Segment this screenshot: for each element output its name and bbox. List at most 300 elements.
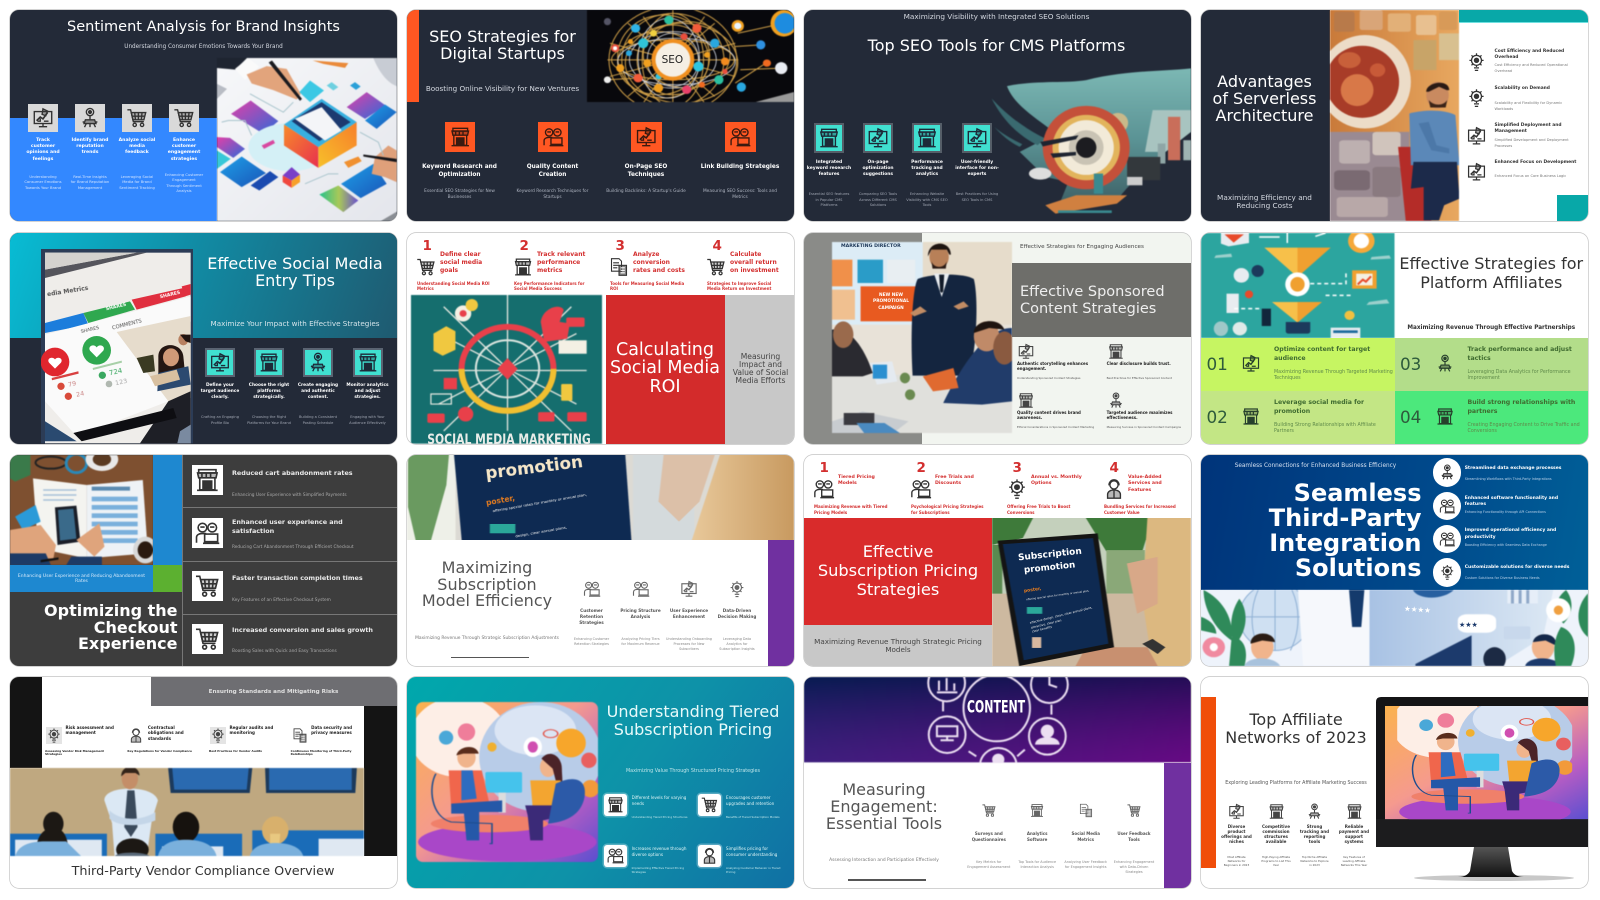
subtitle: Maximizing Revenue Through Strategic Subscription Adjustments bbox=[415, 636, 559, 640]
subtitle: Assessing Interaction and Participation Effectively bbox=[829, 858, 939, 863]
title: ROI bbox=[649, 377, 681, 397]
title bbox=[1216, 711, 1376, 748]
item 4: calculate return: Media Return on Investment bbox=[707, 286, 771, 291]
item: on-page SEO: On-Page SEO bbox=[625, 164, 667, 170]
title: Essential Tools bbox=[826, 814, 942, 833]
item: strong tracking bbox=[1295, 803, 1334, 869]
title: Top SEO Tools for CMS Platforms bbox=[868, 36, 1125, 55]
item 4: calculate return: 4 bbox=[712, 238, 722, 254]
image text: subscription: Subscription bbox=[1018, 547, 1082, 563]
item 2: free trials: 2 bbox=[916, 460, 926, 476]
block 01 bbox=[1201, 338, 1394, 391]
item: cost efficiency: Overhead bbox=[1494, 69, 1512, 73]
item: track customer opinions: Consumer Emotions bbox=[24, 180, 62, 184]
item: analyze social media feedback: Leveraging Social bbox=[121, 175, 153, 179]
item: reliable payment bbox=[1334, 803, 1374, 869]
subtitle: Reducing Costs bbox=[1236, 201, 1293, 210]
block 01: 01 bbox=[1206, 354, 1228, 374]
slide: Third-Party Vendor Compliance Overview bbox=[10, 677, 397, 888]
item: regular audits: Best Practices for Vendor Audits bbox=[209, 749, 262, 753]
item 4: value-added bbox=[1094, 462, 1191, 517]
item: quality content bbox=[516, 122, 588, 200]
item: encourages upgrades: upgrades and retention bbox=[726, 801, 774, 806]
image text: pill stars: ★★★ bbox=[1459, 621, 1478, 629]
item 3: analyze conversion bbox=[610, 238, 685, 291]
item: user-friendly interface: experts bbox=[968, 172, 986, 177]
item: keyword research features: Platforms bbox=[820, 203, 838, 207]
item: strong tracking: reporting bbox=[1304, 834, 1325, 839]
title: Understanding Tiered bbox=[607, 702, 779, 721]
item: clear disclosure: Best Practices for Effective Sponsored Content bbox=[1107, 376, 1172, 380]
row: increased conversion: Boosting Sales with Quick and Easy Transactions bbox=[232, 649, 337, 654]
item 1: define goals: 1 bbox=[422, 238, 432, 254]
item: customer retention: Strategies bbox=[579, 620, 604, 625]
item: keyword research: Essential SEO Strategies for New bbox=[424, 189, 495, 194]
slide: Advantages of Serverless Architecture bbox=[1201, 10, 1588, 221]
item: create authentic content: Building a Consistent bbox=[299, 415, 337, 419]
title: Effective bbox=[863, 542, 933, 561]
item 1: tiered pricing: Maximizing Revenue with Tiered bbox=[814, 504, 887, 509]
image text: new promotional campaign: NEW NEW bbox=[879, 293, 903, 298]
item: enhanced software: features bbox=[1465, 502, 1486, 507]
title: Strategies bbox=[857, 580, 939, 599]
item: targeted audience bbox=[1107, 392, 1193, 440]
item: strong tracking: Top Niche Affiliate bbox=[1302, 855, 1327, 859]
image text: red share band: SHARES bbox=[160, 291, 181, 301]
item: identify brand reputation trends bbox=[70, 104, 109, 190]
item: cost efficiency: Overhead bbox=[1494, 55, 1518, 60]
item: regular audits: monitoring bbox=[230, 730, 255, 735]
item: scalability: Scalability on Demand bbox=[1494, 86, 1550, 91]
item: quality content: Quality content drives brand bbox=[1017, 410, 1081, 415]
row: increased conversion bbox=[182, 614, 397, 666]
item: user experience: Processes for New bbox=[674, 642, 704, 646]
item: quality content: Quality Content bbox=[527, 164, 578, 170]
item: keyword research: Keyword Research and bbox=[422, 164, 497, 170]
title bbox=[804, 782, 964, 832]
item 2: free trials: Psychological Pricing Strategies bbox=[911, 504, 984, 509]
item: simplifies pricing: Analyzing Customer Behavior in Tiered bbox=[726, 866, 780, 870]
title: Digital Startups bbox=[440, 44, 565, 63]
item: user-friendly interface bbox=[955, 123, 999, 202]
item: user-friendly interface: Best Practices for Using bbox=[956, 192, 998, 196]
block 03: Leveraging Data Analytics for Performance bbox=[1468, 370, 1571, 375]
image text: design details: effective design, clean, clear annual plans, bbox=[1029, 605, 1093, 625]
item: performance tracking bbox=[906, 123, 948, 207]
item: authentic storytelling bbox=[1017, 344, 1088, 380]
item: on-page optimization: Comparing SEO Tools bbox=[859, 192, 897, 196]
item: identify brand reputation trends: reputation bbox=[76, 144, 104, 149]
item: link building: Measuring SEO Success: Tools and bbox=[703, 189, 777, 194]
item: customizable solutions: Custom Solutions for Diverse Business Needs bbox=[1465, 576, 1540, 580]
item: streamlined data exchange: Streamlined data exchange processes bbox=[1465, 466, 1561, 471]
item 3: annual vs monthly: 3 bbox=[1012, 460, 1022, 476]
subtitle: Impact and bbox=[739, 360, 782, 369]
item: reliable payment: Key Features of bbox=[1343, 855, 1365, 859]
item 1: tiered pricing bbox=[804, 462, 901, 517]
image text: green share band: SHARES bbox=[106, 303, 127, 313]
title bbox=[610, 340, 720, 397]
header image: content cycle diagram bbox=[804, 677, 1191, 763]
image text: 724: 724 bbox=[108, 367, 123, 378]
item: analyze social media feedback: feedback bbox=[125, 150, 149, 155]
item 1: define goals: Metrics bbox=[417, 286, 434, 291]
row: enhanced user experience: Enhanced user experience and bbox=[232, 518, 343, 526]
item 2: free trials: Discounts bbox=[935, 481, 961, 486]
item: competitive commission: commission bbox=[1262, 829, 1290, 834]
item: contractual obligations bbox=[127, 723, 207, 759]
item: create authentic content: Posting Schedule bbox=[303, 421, 333, 425]
block 02: Leverage social media for bbox=[1274, 399, 1364, 406]
item: user feedback tools: Enhancing Engagement bbox=[1114, 860, 1154, 864]
subtitle: Maximize Your Impact with Effective Strategies bbox=[210, 319, 380, 328]
item: on-page SEO bbox=[606, 122, 686, 194]
item: user feedback tools: Strategies bbox=[1125, 870, 1143, 874]
item 4: value-added: 4 bbox=[1110, 460, 1119, 476]
title bbox=[1394, 255, 1588, 292]
item: user experience: Understanding Onboarding bbox=[666, 637, 712, 641]
item: monitor analytics: Engaging with Your bbox=[350, 415, 385, 419]
item: increases revenue: diverse options bbox=[632, 852, 663, 857]
item: enhance customer engagement: Enhance bbox=[173, 138, 195, 143]
item 1: define goals: social media bbox=[440, 259, 482, 266]
item: quality content: awareness. bbox=[1017, 415, 1042, 420]
title: SEO Strategies for bbox=[429, 27, 576, 46]
item 4: calculate return: on investment bbox=[730, 267, 779, 274]
block 01: Optimize content for target bbox=[1274, 346, 1370, 353]
image text: design details bbox=[1029, 605, 1095, 634]
title: Advantages bbox=[1217, 72, 1312, 90]
title: Measuring bbox=[842, 780, 926, 799]
row: reduced cart abandonment: Reduced cart abandonment rates bbox=[232, 469, 353, 477]
item 3: annual vs monthly: Conversions bbox=[1007, 510, 1035, 515]
item: increases revenue: Increases revenue through bbox=[632, 846, 686, 851]
title bbox=[429, 27, 576, 63]
item: monitor analytics: and adjust bbox=[355, 389, 380, 394]
item: streamlined data exchange bbox=[1432, 458, 1588, 487]
slide: Measuring Engagement: Essential Tools bbox=[804, 677, 1191, 888]
block 01: Maximizing Revenue Through Targeted Marketing bbox=[1274, 370, 1393, 375]
item 3: analyze conversion: ROI bbox=[610, 286, 618, 291]
row: enhanced user experience: Reducing Cart Abandonment Through Efficient Checkout bbox=[232, 545, 354, 550]
item: create authentic content: Create engaging bbox=[298, 383, 338, 388]
item: diverse offerings: product bbox=[1228, 829, 1246, 834]
item: simplifies pricing: Pricing bbox=[726, 870, 735, 874]
item: keyword research features: keyword research bbox=[807, 166, 851, 171]
item: data-driven: Decision Making bbox=[718, 614, 756, 619]
item: on-page SEO: Building Backlinks: A Startup's Guide bbox=[606, 189, 686, 194]
red title panel bbox=[606, 295, 724, 444]
item: social media metrics: for Engagement Insights bbox=[1065, 865, 1107, 869]
item 1: tiered pricing: 1 bbox=[820, 460, 829, 476]
image: SEO network globe bbox=[586, 10, 794, 103]
item 2: free trials: for Subscriptions bbox=[911, 510, 950, 515]
item 1: tiered pricing: Tiered Pricing bbox=[838, 475, 875, 480]
item: pricing structure: Analyzing Pricing Tiers bbox=[621, 637, 660, 641]
item: cost efficiency: Cost Efficiency and Reduced bbox=[1494, 49, 1564, 54]
title: Subscription Pricing bbox=[614, 720, 772, 739]
row: enhanced user experience: satisfaction bbox=[232, 526, 274, 534]
item 2: track metrics: metrics bbox=[537, 267, 562, 274]
item 4: value-added: Features bbox=[1128, 488, 1151, 493]
underline bbox=[451, 656, 529, 658]
subtitle bbox=[1217, 193, 1312, 210]
header panel bbox=[1201, 455, 1588, 590]
purple bar bbox=[1164, 763, 1191, 888]
item 2: track metrics: performance bbox=[537, 259, 580, 266]
gray subtitle panel bbox=[804, 625, 992, 666]
item: user-friendly interface: interface for non- bbox=[955, 166, 999, 171]
item: streamlined data exchange: Streamlining Workflows with Third-Party Integrations bbox=[1465, 477, 1552, 481]
image: presenter in meeting room bbox=[831, 242, 1013, 434]
item: contractual obligations: standards bbox=[148, 736, 171, 741]
item: analyze social media feedback bbox=[118, 104, 155, 190]
row: faster completion: Faster transaction completion times bbox=[232, 574, 363, 582]
black left bar bbox=[10, 677, 42, 768]
item: analyze social media feedback: media bbox=[129, 144, 145, 149]
item: strong tracking: Networks to Explore bbox=[1300, 859, 1329, 863]
item: quality content bbox=[1017, 392, 1103, 440]
item: authentic storytelling: Authentic storytelling enhances bbox=[1017, 361, 1088, 366]
gray side panel bbox=[724, 295, 794, 444]
item: clear disclosure bbox=[1107, 343, 1193, 391]
item: simplified deployment: Simplified Development and Deployment bbox=[1494, 138, 1569, 142]
title bbox=[1020, 284, 1165, 317]
item: scalability: Scalability and Flexibility for Dynamic bbox=[1494, 101, 1562, 105]
item: link building: Link Building Strategies bbox=[701, 164, 779, 170]
item: improved efficiency: productivity bbox=[1465, 535, 1496, 540]
item: performance tracking: analytics bbox=[916, 172, 938, 177]
item: competitive commission: Year bbox=[1273, 863, 1279, 867]
item: analytics software bbox=[1013, 803, 1062, 877]
slide: Effective Social Media Entry Tips bbox=[10, 233, 397, 444]
block 02: promotion bbox=[1274, 408, 1310, 415]
title: Integration bbox=[1269, 529, 1422, 557]
item: enhance customer engagement: Enhancing Customer bbox=[165, 173, 203, 177]
item: data security: Data security and bbox=[311, 725, 352, 730]
purple bar bbox=[768, 540, 794, 666]
title: Calculating bbox=[616, 340, 714, 360]
item: contractual obligations: Key Regulations for Vendor Compliance bbox=[127, 749, 192, 753]
item: define target audience bbox=[200, 348, 240, 425]
item: user experience bbox=[664, 580, 714, 654]
block 04: Creating Engaging Content to Drive Traffic and bbox=[1468, 423, 1580, 428]
item: surveys bbox=[964, 803, 1013, 877]
item: enhanced focus: Enhanced Focus on Development bbox=[1494, 160, 1576, 165]
item: encourages upgrades bbox=[698, 794, 788, 824]
subtitle: Seamless Connections for Enhanced Business Efficiency bbox=[1235, 463, 1396, 469]
gradient header panel bbox=[10, 233, 397, 338]
item 2: track metrics bbox=[514, 238, 586, 291]
title: Platform Affiliates bbox=[1420, 273, 1562, 292]
item: create authentic content bbox=[298, 348, 338, 425]
item: customizable solutions: Customizable solutions for diverse needs bbox=[1465, 565, 1569, 570]
item: identify brand reputation trends: Management bbox=[78, 186, 102, 190]
item: create authentic content: and authentic bbox=[301, 389, 335, 394]
title: Content Strategies bbox=[1020, 301, 1156, 317]
item: risk assessment: Assessing Vendor Risk Management bbox=[45, 749, 104, 753]
subtitle bbox=[804, 638, 992, 654]
item: on-page optimization: optimization bbox=[862, 166, 894, 171]
image text: poster: poster, bbox=[1024, 587, 1042, 594]
row: faster completion bbox=[182, 560, 397, 614]
item: diverse offerings: Diverse bbox=[1228, 824, 1245, 829]
item: user experience: Subscribers bbox=[679, 647, 699, 651]
title: Third-Party Vendor Compliance Overview bbox=[72, 864, 334, 879]
item: simplifies pricing: Simplifies pricing for bbox=[726, 846, 768, 851]
item: clear disclosure: Clear disclosure builds trust. bbox=[1107, 361, 1171, 366]
item: contractual obligations: obligations and bbox=[148, 730, 184, 735]
image text: marketing director: MARKETING DIRECTOR bbox=[841, 244, 901, 249]
title: Architecture bbox=[1216, 106, 1313, 124]
item: enhance customer engagement: Through Sentiment bbox=[166, 184, 202, 188]
item: data security: Relationships bbox=[291, 752, 313, 756]
title: Entry Tips bbox=[255, 271, 335, 290]
item: keyword research bbox=[422, 122, 497, 200]
item 1: define goals: goals bbox=[440, 267, 458, 274]
image label: SEO: SEO bbox=[662, 54, 683, 66]
item 2: track metrics: 2 bbox=[520, 238, 529, 254]
item: data security: privacy measures bbox=[311, 730, 352, 735]
item 3: annual vs monthly: Options bbox=[1031, 481, 1052, 486]
item: strong tracking: tracking and bbox=[1300, 829, 1329, 834]
item: analyze social media feedback: Media for Brand bbox=[122, 180, 152, 184]
item: performance tracking: Visibility with CMS SEO bbox=[906, 198, 948, 202]
subtitle: Maximizing Value Through Structured Pricing Strategies bbox=[626, 769, 760, 774]
dark title panel bbox=[1201, 10, 1330, 221]
block 04: Conversions bbox=[1468, 429, 1497, 434]
slide: Calculating Social Media ROI bbox=[407, 233, 794, 444]
item: different levels: Understanding Tiered Pricing Structures bbox=[632, 815, 687, 819]
blue vertical bar bbox=[153, 455, 182, 565]
item: risk assessment: Strategies bbox=[45, 752, 62, 756]
item: user-friendly interface: User-friendly bbox=[961, 160, 993, 165]
title bbox=[1213, 72, 1316, 124]
item 3: annual vs monthly bbox=[997, 462, 1094, 517]
subtitle: Understanding Consumer Emotions Towards Your Brand bbox=[124, 44, 283, 50]
subtitle: Value of Social bbox=[733, 368, 788, 377]
item 4: value-added: Value-Added bbox=[1128, 475, 1161, 480]
item: regular audits: Regular audits and bbox=[230, 725, 273, 730]
item: define target audience: Profile Bio bbox=[211, 421, 229, 425]
item 1: tiered pricing: Pricing Models bbox=[814, 510, 847, 515]
title: Social Media bbox=[610, 358, 720, 378]
item 3: analyze conversion: rates and costs bbox=[633, 267, 685, 274]
item: choose platforms: Platforms for Your Brand bbox=[247, 421, 291, 425]
teal corner block bbox=[1557, 195, 1588, 221]
item: simplified deployment: Processes bbox=[1494, 144, 1512, 148]
item: user feedback tools: User Feedback bbox=[1117, 831, 1151, 836]
slide: SEO Strategies for Digital Startups bbox=[407, 10, 794, 221]
item: define target audience: Crafting an Engaging bbox=[201, 415, 239, 419]
item 4: calculate return: overall return bbox=[730, 259, 777, 266]
item: create authentic content: content. bbox=[308, 395, 328, 400]
item: monitor analytics: Audience Effectively bbox=[349, 421, 386, 425]
item: link building: Metrics bbox=[732, 195, 748, 200]
item: identify brand reputation trends: Identify brand bbox=[72, 138, 108, 143]
item: competitive commission: Programs to List This bbox=[1261, 859, 1291, 863]
item: simplified deployment: Management bbox=[1494, 129, 1527, 134]
subtitle: Maximizing Efficiency and bbox=[1217, 193, 1312, 202]
item: keyword research: Optimization bbox=[438, 172, 481, 178]
item: increases revenue bbox=[604, 845, 694, 875]
title: Third-Party bbox=[1269, 504, 1422, 532]
image text: clear annual plans: design, clear annual plans, bbox=[515, 524, 567, 539]
item: authentic storytelling: engagement. bbox=[1017, 366, 1046, 371]
item: reliable payment: payment and bbox=[1339, 829, 1369, 834]
item: diverse offerings: offerings and bbox=[1221, 834, 1252, 839]
item: data-driven: Analytics for bbox=[726, 642, 748, 646]
title: Solutions bbox=[1295, 554, 1422, 582]
item: competitive commission bbox=[1256, 803, 1296, 869]
item: link building bbox=[701, 122, 780, 200]
item: targeted audience: Measuring Success in Sponsored Content Campaigns bbox=[1107, 425, 1181, 429]
item: track customer opinions: customer bbox=[31, 144, 55, 149]
subtitle: Boosting Online Visibility for New Ventures bbox=[426, 84, 579, 93]
title: Optimizing the bbox=[44, 601, 178, 620]
subtitle: Maximizing Visibility with Integrated SEO Solutions bbox=[904, 12, 1089, 21]
item: performance tracking: tracking and bbox=[911, 166, 943, 171]
item: reliable payment: Leading Affiliate bbox=[1343, 859, 1365, 863]
image text: new promotional campaign bbox=[873, 292, 909, 311]
image text: 79: 79 bbox=[67, 380, 77, 389]
item 1: define goals bbox=[417, 238, 490, 291]
item: customer retention bbox=[567, 580, 616, 654]
item 2: free trials: Free Trials and bbox=[935, 475, 974, 480]
item: user feedback tools: Tools bbox=[1128, 837, 1140, 842]
item: data-driven: Data-Driven bbox=[723, 608, 751, 613]
item: choose platforms: Choose the right bbox=[249, 383, 289, 388]
subtitle bbox=[732, 352, 788, 385]
title: Experience bbox=[78, 634, 178, 653]
item: enhanced software: Enhanced software functionality and bbox=[1465, 496, 1558, 501]
item: keyword research features bbox=[807, 123, 851, 207]
item: targeted audience: Targeted audience maximizes bbox=[1107, 410, 1172, 415]
slide: Effective Strategies for Platform Affiliates bbox=[1201, 233, 1588, 444]
block 02: Partners bbox=[1274, 429, 1294, 434]
item 4: value-added: Services and bbox=[1128, 481, 1162, 486]
item: reliable payment: systems bbox=[1344, 839, 1363, 844]
title: Effective Sponsored bbox=[1020, 284, 1165, 300]
image text: comments column: COMMENTS bbox=[112, 318, 142, 331]
block 04: 04 bbox=[1400, 407, 1421, 427]
item: social media metrics: Social Media bbox=[1071, 831, 1100, 836]
image: blurred tablet promotion bbox=[407, 455, 794, 540]
item: data security: Continuous Monitoring of Third-Party bbox=[291, 749, 352, 753]
subtitle: Exploring Leading Platforms for Affiliate Marketing Success bbox=[1225, 781, 1367, 786]
item: cost efficiency bbox=[1469, 48, 1568, 73]
item: competitive commission: Competitive bbox=[1262, 824, 1290, 829]
title panel bbox=[1012, 263, 1191, 337]
item: monitor analytics bbox=[346, 348, 389, 425]
item: track customer opinions: Understanding bbox=[29, 175, 57, 179]
title: Subscription bbox=[437, 575, 537, 594]
item: simplifies pricing: consumer understanding bbox=[726, 852, 777, 857]
underline bbox=[848, 879, 926, 881]
item 3: annual vs monthly: Annual vs. Monthly bbox=[1031, 475, 1082, 480]
item: on-page optimization bbox=[859, 123, 897, 207]
item: track customer opinions: feelings bbox=[33, 157, 53, 162]
slide: Sentiment Analysis for Brand Insights bbox=[10, 10, 397, 221]
item 4: calculate return: Strategies to Improve Social bbox=[707, 281, 771, 286]
item: increases revenue: Implementing Effective Tiered Pricing bbox=[632, 866, 684, 870]
title: Model Efficiency bbox=[422, 591, 552, 610]
title bbox=[10, 603, 178, 653]
image: couple at table with colourful icons bbox=[416, 702, 598, 862]
gray header band bbox=[151, 677, 397, 706]
item: increases revenue: Strategies bbox=[632, 870, 646, 874]
image: call centre training room bbox=[10, 768, 364, 856]
